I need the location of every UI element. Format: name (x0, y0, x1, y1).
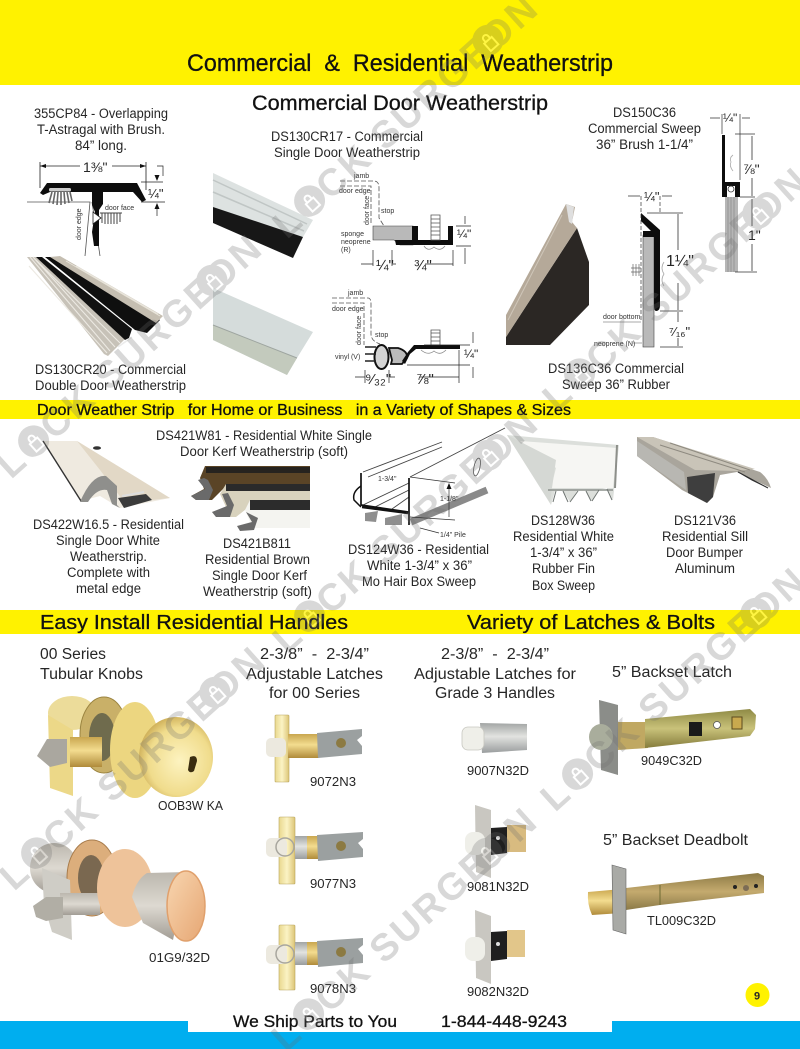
diagram: DS124W36 box sweep (354, 428, 505, 539)
heading: latches for grade 3 handles: Grade 3 Handles (435, 685, 555, 702)
diagram: DS130CR17 cross section: (R) (341, 247, 351, 254)
product: brass keyed knob (37, 696, 213, 798)
caption: DS128W36 (513, 513, 614, 593)
band heading: latches: Variety of Latches & Bolts (467, 611, 715, 634)
caption: DS128W36: Rubber Fin (532, 561, 595, 576)
caption: DS422W16.5: Single Door White (56, 533, 160, 548)
caption: DS422W16.5: Weatherstrip. (70, 549, 147, 564)
caption: DS150C36: DS150C36 (613, 105, 676, 120)
yellow band: door weather strip (0, 400, 800, 419)
label: 9007N32D: 9007N32D (467, 764, 529, 778)
heading: latches for 00 series: for 00 Series (269, 685, 360, 702)
caption: DS128W36: Box Sweep (532, 578, 595, 593)
label: OOB3W KA: OOB3W KA (158, 799, 224, 813)
diagram: DS124W36 box sweep: 1-3/4" (378, 476, 397, 483)
heading: 5 inch backset deadbolt: 5” Backset Deadbolt (603, 832, 749, 849)
diagram: T-astragal cross section: door edge (76, 208, 83, 240)
diagram: DS150C36 brush sweep: ⅞" (743, 161, 760, 177)
heading: latches for grade 3 handles: Adjustable Latches for (414, 666, 576, 683)
caption: 355CP84 (34, 106, 168, 153)
caption: DS421B811: Residential Brown (205, 552, 310, 567)
diagram: DS150C36 brush sweep: 1" (748, 227, 761, 243)
heading: latches for grade 3 handles: 2-3/8” - 2-3/4” (441, 646, 549, 663)
caption: DS150C36 (588, 105, 701, 152)
diagram: DS130CR17 cross section: ¾" (414, 257, 432, 274)
product: latch 9081N32D (465, 805, 526, 878)
footer blue bar (0, 1021, 800, 1049)
label: 01G9/32D: 01G9/32D (149, 951, 210, 965)
page number badge (746, 983, 770, 1007)
caption: DS121V36: Door Bumper (666, 545, 743, 560)
caption: DS421W81: DS421W81 - Residential White Single (156, 428, 372, 443)
caption: DS421B811: Single Door Kerf (212, 568, 307, 583)
diagram: DS130CR17 cross section: stop (381, 208, 394, 215)
caption: DS130CR17: Single Door Weatherstrip (274, 145, 420, 160)
title: Commercial & Residential Weatherstrip (187, 50, 613, 77)
caption: DS422W16.5: DS422W16.5 - Residential (33, 517, 184, 532)
heading: latches for 00 series: Adjustable Latches (246, 666, 383, 683)
label: 9072N3: 9072N3 (310, 775, 356, 789)
diagram: T-astragal cross section: door face (105, 205, 134, 212)
caption: DS422W16.5: Complete with (67, 565, 150, 580)
footer text: shipping: We Ship Parts to You (233, 1012, 397, 1031)
diagram: DS130CR17 cross section: sponge (341, 231, 364, 238)
heading: tubular knobs (40, 646, 143, 683)
caption: DS421W81: Door Kerf Weatherstrip (soft) (180, 444, 348, 459)
label: 9049C32D: 9049C32D (641, 754, 702, 768)
diagram: DS130CR17 cross section: neoprene (341, 239, 371, 246)
product: latch 9082N32D (465, 910, 525, 984)
caption: DS136C36: DS136C36 Commercial (548, 361, 684, 376)
caption: DS150C36: Commercial Sweep (588, 121, 701, 136)
caption: DS128W36: 1-3/4” x 36” (530, 545, 597, 560)
caption: DS130CR17: DS130CR17 - Commercial (271, 129, 423, 144)
diagram: DS130CR17 vinyl cross section: ⅞" (416, 371, 434, 388)
product: DS128W36 rubber fin sweep (507, 435, 619, 505)
caption: DS128W36: Residential White (513, 529, 614, 544)
caption: DS130CR20 (35, 362, 186, 393)
caption: DS124W36: Mo Hair Box Sweep (362, 574, 476, 589)
heading: commercial door weatherstrip: Commercial Door Weatherstrip (252, 92, 548, 115)
caption: DS121V36 (662, 513, 748, 576)
product: DS130CR17 silver strip with black sponge (213, 173, 313, 258)
heading: latches for grade 3 handles (414, 646, 576, 702)
diagram: DS124W36 box sweep: 1-1/8" (440, 496, 459, 503)
label: TL009C32D: TL009C32D (647, 914, 716, 928)
diagram: DS130CR17 vinyl cross section: stop (375, 332, 388, 339)
diagram: DS136C36 cross section: 1¼" (666, 253, 694, 270)
product: DS422W16.5 strip (43, 441, 170, 508)
product: DS130CR17 vinyl strip (213, 288, 313, 375)
heading: tubular knobs: Tubular Knobs (40, 666, 143, 683)
caption: DS121V36: DS121V36 (674, 513, 736, 528)
product: latch 9072N3 (266, 715, 362, 782)
caption: DS124W36: DS124W36 - Residential (348, 542, 489, 557)
caption: DS421B811: Weatherstrip (soft) (203, 584, 312, 599)
top yellow header band (0, 0, 800, 85)
watermark: lower left: LOCK SURGEON (0, 640, 273, 899)
product: latch 9077N3 (266, 817, 363, 884)
diagram: DS136C36 cross section: ⁷⁄₁₆" (669, 324, 691, 339)
product: TL009C32D deadbolt (588, 865, 764, 934)
diagram: DS130CR17 cross section (339, 173, 471, 274)
caption: DS124W36: White 1-3/4” x 36” (367, 558, 472, 573)
caption: DS130CR20: DS130CR20 - Commercial (35, 362, 186, 377)
product: DS130CR20 double door strip (27, 256, 163, 356)
caption: DS421B811 (203, 536, 312, 599)
diagram: T-astragal cross section: ¼" (148, 186, 164, 201)
diagram: DS130CR17 cross section: door face (364, 196, 371, 225)
product: DS136C36 rubber sweep (506, 204, 589, 345)
caption: DS130CR17 (271, 129, 423, 160)
caption: DS124W36 (348, 542, 489, 589)
caption: 355CP84: 355CP84 - Overlapping (34, 106, 168, 121)
diagram: DS136C36 cross section: door bottom (603, 314, 641, 321)
band heading: handles: Easy Install Residential Handles (40, 611, 348, 634)
caption: DS121V36: Aluminum (675, 561, 735, 576)
diagram: DS130CR17 vinyl cross section: ¼" (464, 347, 478, 361)
diagram: DS136C36 cross section: neoprene (N) (594, 341, 635, 348)
caption: DS136C36: Sweep 36” Rubber (562, 377, 670, 392)
caption: DS150C36: 36” Brush 1-1/4” (596, 137, 693, 152)
caption: DS136C36 (548, 361, 684, 392)
caption: DS422W16.5 (33, 517, 184, 596)
product: copper and nickel knob (30, 840, 205, 941)
diagram: DS130CR17 vinyl cross section (332, 290, 478, 388)
label: 9078N3: 9078N3 (310, 982, 356, 996)
caption: DS421B811: DS421B811 (223, 536, 291, 551)
diagram: DS136C36 cross section (594, 189, 694, 348)
page number badge: 9 (754, 990, 760, 1002)
diagram: DS130CR17 cross section: ¼" (376, 257, 394, 274)
product: 9049C32D latch (589, 700, 756, 775)
caption: DS130CR20: Double Door Weatherstrip (35, 378, 186, 393)
heading: latches for 00 series (246, 646, 383, 702)
caption: DS421W81 (156, 428, 372, 459)
diagram: DS130CR17 vinyl cross section: door edge (332, 306, 364, 313)
caption: 355CP84: T-Astragal with Brush. (37, 122, 165, 137)
heading: tubular knobs: 00 Series (40, 646, 106, 663)
yellow band: handles and latches (0, 610, 800, 634)
label: 9081N32D: 9081N32D (467, 880, 529, 894)
diagram: DS130CR17 vinyl cross section: ⁹⁄₃₂" (365, 371, 391, 388)
caption: DS121V36: Residential Sill (662, 529, 748, 544)
diagram: DS124W36 box sweep: 1/4" Pile (440, 532, 466, 539)
diagram: DS130CR17 vinyl cross section: door face (356, 316, 363, 345)
label: 9082N32D: 9082N32D (467, 985, 529, 999)
product: latch 9007N32D (462, 723, 527, 753)
diagram: DS150C36 brush sweep (710, 111, 761, 272)
diagram: T-astragal cross section (27, 159, 165, 256)
diagram: DS130CR17 vinyl cross section: vinyl (V) (335, 354, 360, 361)
caption: DS422W16.5: metal edge (76, 581, 141, 596)
diagram: DS150C36 brush sweep: ¼" (723, 111, 737, 125)
product: DS421 kerf weatherstrips (191, 466, 310, 531)
heading: latches for 00 series: 2-3/8” - 2-3/4” (260, 646, 369, 663)
diagram: DS136C36 cross section: ¼" (644, 189, 660, 204)
product: DS121V36 sill bumper (637, 437, 771, 503)
caption: 355CP84: 84” long. (75, 138, 127, 153)
label: 9077N3: 9077N3 (310, 877, 356, 891)
band text: door weather strip: Door Weather Strip for Home or Business in a Variety of Shapes & Sizes (37, 402, 571, 419)
diagram: DS130CR17 cross section: jamb (353, 173, 369, 180)
diagram: T-astragal cross section: 1⅜" (83, 159, 107, 175)
diagram: DS130CR17 cross section: door edge (339, 188, 371, 195)
caption: DS128W36: DS128W36 (531, 513, 595, 528)
watermark: center: LOCK SURGEON (265, 403, 546, 662)
diagram: DS130CR17 vinyl cross section: jamb (347, 290, 363, 297)
diagram: DS130CR17 cross section: ¼" (457, 227, 471, 241)
product: latch 9078N3 (266, 925, 363, 990)
heading: 5 inch backset latch: 5” Backset Latch (612, 664, 732, 681)
footer text: phone number: 1-844-448-9243 (441, 1012, 567, 1031)
